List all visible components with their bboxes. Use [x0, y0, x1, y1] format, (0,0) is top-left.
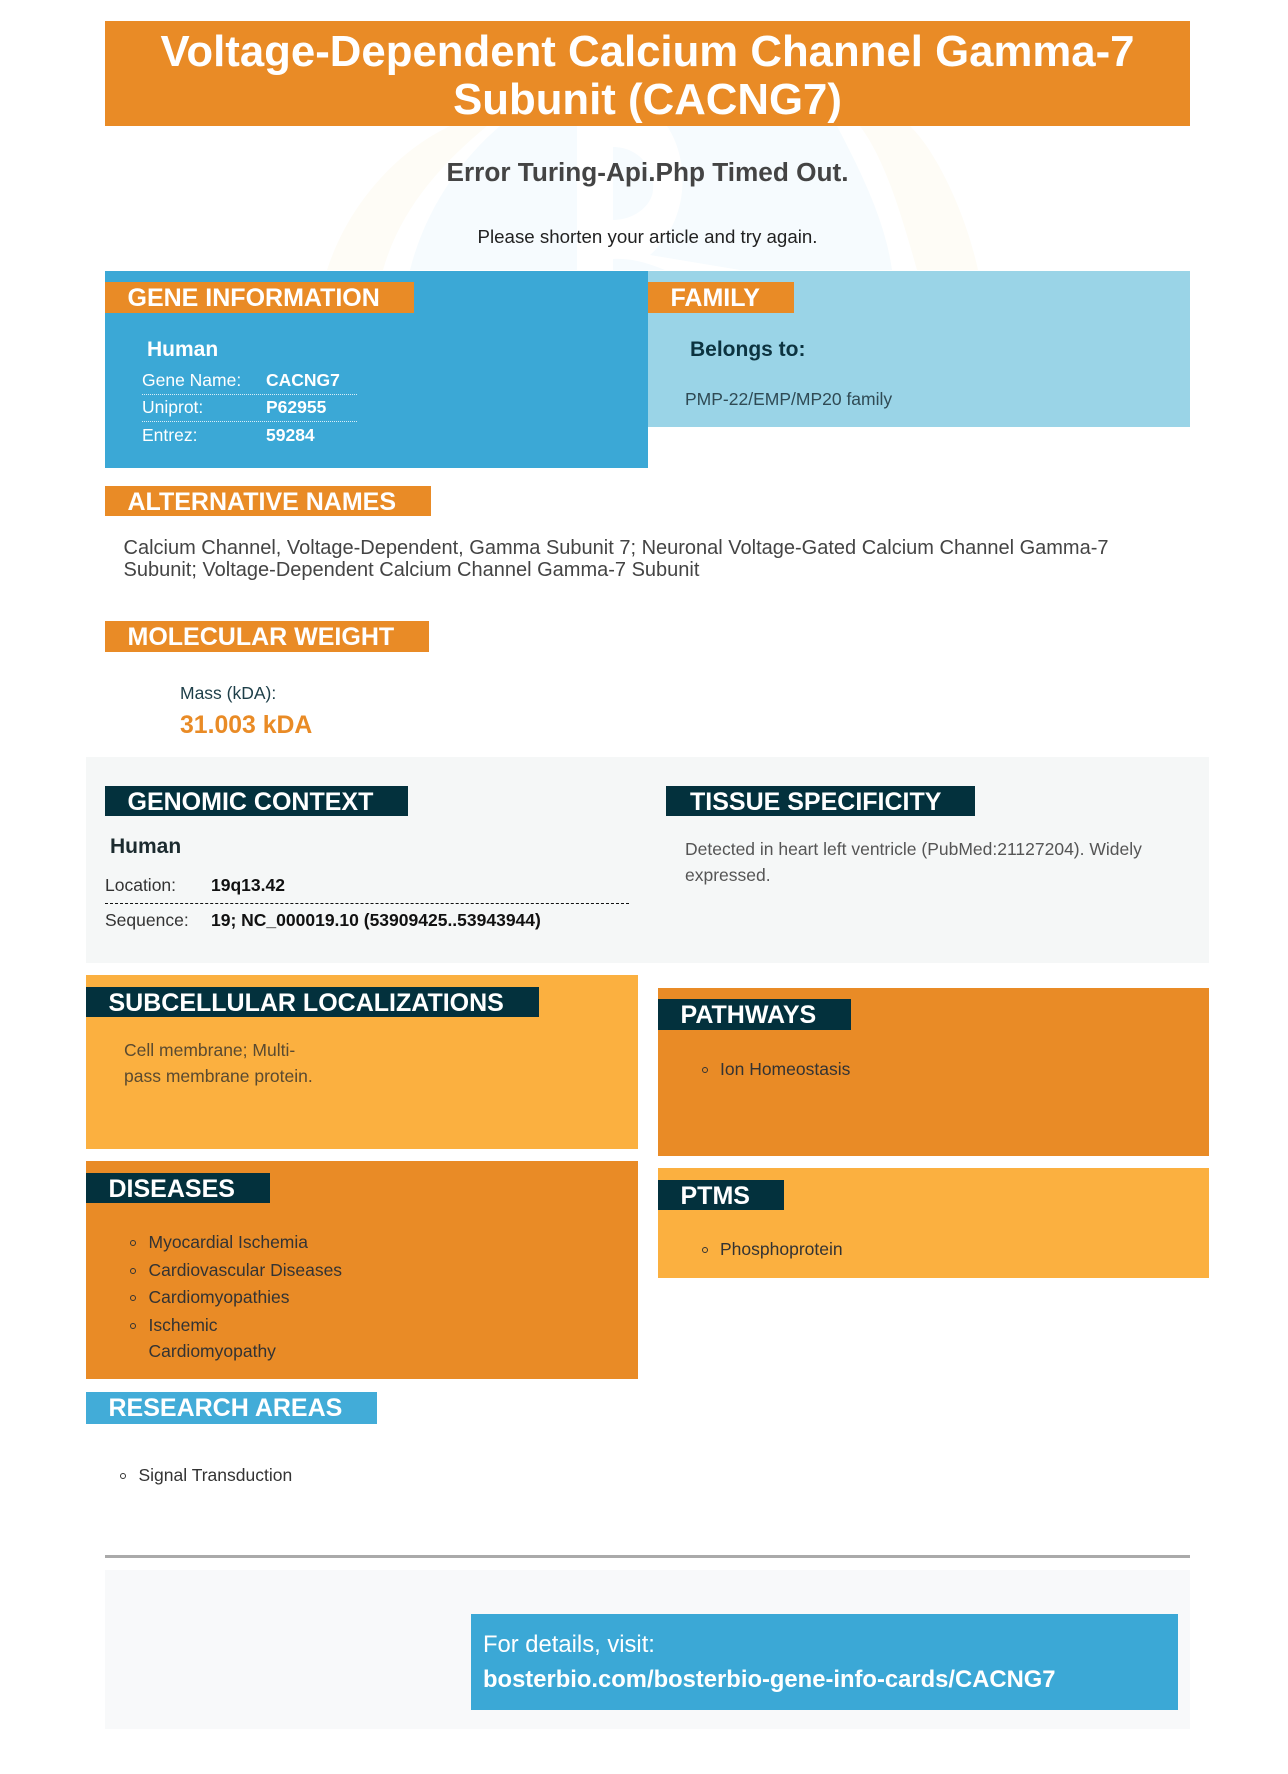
- heading: subcellular localizations: SUBCELLULAR LOCALIZATIONS: [108, 989, 504, 1017]
- disease list: Ischemic: [148, 1315, 218, 1335]
- heading: research areas: RESEARCH AREAS: [108, 1394, 342, 1422]
- sequence row: Sequence:: [105, 910, 189, 930]
- panel: pathways: [658, 988, 1209, 1156]
- location row: Location:: [105, 875, 176, 895]
- callout: details link: [471, 1614, 1178, 1710]
- disease list: [130, 1232, 342, 1361]
- panel: diseases: [86, 1161, 638, 1379]
- uniprot row: P62955: [266, 397, 326, 417]
- entrez row: 59284: [266, 425, 315, 445]
- heading: ptms: [658, 1180, 784, 1210]
- heading: alternative names: ALTERNATIVE NAMES: [128, 488, 396, 516]
- sequence row: 19; NC_000019.10 (53909425..53943944): [211, 910, 541, 930]
- panel: subcellular localizations: [86, 975, 638, 1149]
- heading: tissue specificity: TISSUE SPECIFICITY: [690, 788, 941, 816]
- gene name row: [142, 367, 357, 395]
- ptm list: Phosphoprotein: [720, 1239, 843, 1259]
- disease list: Myocardial Ischemia: [148, 1232, 308, 1252]
- disease list: Cardiomyopathies: [148, 1287, 290, 1307]
- link url: bosterbio.com/bosterbio-gene-info-cards/CACNG7: [483, 1666, 1056, 1693]
- panel: family: [648, 271, 1190, 427]
- tissue specificity text: Detected in heart left ventricle (PubMed:21127204). Widely: [685, 839, 1142, 859]
- watermark logo: [328, 126, 978, 270]
- uniprot row: [142, 394, 357, 422]
- family text: PMP-22/EMP/MP20 family: [685, 389, 892, 409]
- localization text: [124, 1040, 313, 1086]
- research areas list: Signal Transduction: [138, 1465, 292, 1485]
- heading: pathways: [658, 999, 851, 1030]
- alternative names text: Calcium Channel, Voltage-Dependent, Gamma Subunit 7; Neuronal Voltage-Gated Calcium Channel Gamma-7: [124, 537, 1108, 559]
- title: [105, 21, 1190, 126]
- link label: For details, visit:: [483, 1631, 655, 1658]
- mass label: Mass (kDA):: [180, 683, 276, 703]
- heading: pathways: PATHWAYS: [680, 1001, 816, 1029]
- gene name row: Gene Name:: [142, 370, 241, 390]
- location row: 19q13.42: [211, 875, 285, 895]
- title: Subunit (CACNG7): [453, 75, 842, 124]
- location row: [105, 872, 629, 904]
- disease list: Cardiovascular Diseases: [148, 1260, 342, 1280]
- disease list: Cardiomyopathy: [148, 1341, 276, 1361]
- entrez row: [142, 425, 315, 445]
- gene name row: CACNG7: [266, 370, 340, 390]
- heading: genomic context: GENOMIC CONTEXT: [128, 788, 373, 816]
- heading: ptms: PTMS: [680, 1182, 750, 1210]
- species label: Human: [110, 835, 181, 858]
- alternative names text: [124, 537, 1108, 581]
- panel: ptms: [658, 1168, 1209, 1278]
- mass value: 31.003 kDA: [180, 712, 312, 739]
- heading: family: FAMILY: [670, 284, 760, 312]
- heading: gene information: GENE INFORMATION: [128, 284, 380, 312]
- title: Voltage-Dependent Calcium Channel Gamma-7: [160, 27, 1135, 76]
- localization text: Cell membrane; Multi-: [124, 1040, 295, 1060]
- heading: molecular weight: MOLECULAR WEIGHT: [128, 623, 394, 651]
- belongs to label: Belongs to:: [690, 338, 806, 361]
- uniprot row: Uniprot:: [142, 397, 203, 417]
- tissue specificity text: expressed.: [685, 865, 771, 885]
- panel: gene information: [105, 271, 648, 468]
- heading: diseases: [86, 1173, 270, 1203]
- alternative names text: Subunit; Voltage-Dependent Calcium Channel Gamma-7 Subunit: [124, 559, 699, 581]
- subtitle: Error Turing-Api.Php Timed Out.: [446, 157, 849, 187]
- pathway list: Ion Homeostasis: [720, 1059, 850, 1079]
- entrez row: Entrez:: [142, 425, 197, 445]
- intro text: Please shorten your article and try again.: [478, 226, 817, 247]
- heading: diseases: DISEASES: [108, 1175, 235, 1203]
- tissue specificity text: [685, 839, 1142, 885]
- species label: Human: [147, 338, 218, 361]
- heading: family: [648, 282, 794, 313]
- panel: genomic context and tissue specificity: [86, 757, 1209, 963]
- panel: footer: [105, 1570, 1190, 1729]
- localization text: pass membrane protein.: [124, 1066, 313, 1086]
- divider: [105, 1555, 1190, 1558]
